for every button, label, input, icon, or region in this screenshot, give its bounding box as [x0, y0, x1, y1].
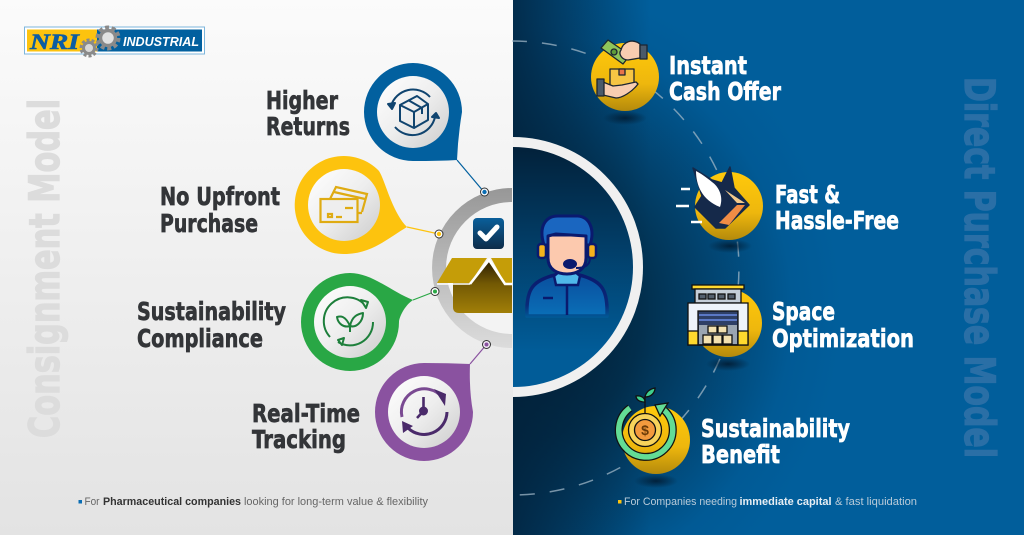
footnote: direct purchase audience: & fast liquidation: [835, 496, 917, 508]
pin: real-time tracking: [375, 340, 490, 461]
text: [772, 297, 914, 353]
dashed orbit: [512, 41, 739, 495]
tail node: [435, 230, 443, 238]
icon: credit cards: [320, 187, 367, 222]
icon: box with circular arrows: [388, 90, 439, 135]
pin: no upfront purchase: [295, 156, 443, 254]
item: Sustainability Benefit: [619, 388, 850, 488]
footnote: consignment audience: For: [84, 496, 100, 508]
icon: cash and box in hands: [597, 40, 647, 98]
text: [775, 180, 899, 235]
footnote: direct purchase audience: immediate capital: [740, 496, 832, 508]
text: Benefit: [701, 440, 780, 469]
logo: NRI Industrial: NRI: [29, 29, 81, 54]
central circle: box side: [432, 188, 512, 348]
label: Real-Time Tracking: [252, 399, 360, 454]
footnote: consignment audience: [78, 496, 428, 508]
text: [669, 51, 782, 106]
panel: consignment model background: [0, 0, 513, 535]
icon: coin with green cycle and sprout: [619, 388, 673, 457]
text: [701, 414, 850, 469]
icon: clock with arrows: [401, 389, 447, 434]
text: Hassle-Free: [775, 206, 899, 235]
central circle: agent side: [513, 137, 643, 397]
item: Space Optimization: [688, 285, 914, 371]
icon: checkbox: [473, 218, 504, 249]
label: Real-Time Tracking: Real-Time: [252, 399, 360, 428]
panel: direct purchase model background: [513, 0, 1024, 535]
label: Sustainability Compliance: Compliance: [137, 324, 263, 353]
icon: open box: [437, 258, 512, 313]
label: Sustainability Compliance: Sustainability: [137, 297, 286, 326]
logo: NRI Industrial: INDUSTRIAL: [123, 35, 199, 49]
icon: coin with green cycle and sprout: $: [641, 422, 649, 438]
text: Cash Offer: [669, 77, 782, 106]
item: Fast and Hassle-Free: [676, 167, 899, 253]
logo: NRI Industrial: [24, 27, 204, 56]
tail node: [482, 340, 490, 348]
label: Real-Time Tracking: Tracking: [252, 425, 346, 454]
pin: higher returns: [364, 63, 488, 196]
tail node: [431, 288, 439, 296]
label: Higher Returns: Higher: [266, 86, 339, 115]
text: Fast &: [775, 180, 840, 209]
label: Higher Returns: Returns: [266, 112, 350, 141]
label: No Upfront Purchase: No Upfront: [160, 182, 280, 211]
icon: customer support agent: [527, 216, 607, 316]
label: Higher Returns: [266, 86, 350, 141]
item: Instant Cash Offer: [591, 40, 782, 125]
footnote: consignment audience: Pharmaceutical companies: [103, 496, 241, 508]
footnote: direct purchase audience: For Companies needing: [624, 496, 737, 508]
icon: warehouse: [688, 285, 748, 345]
icon: winged box: [676, 167, 749, 228]
label: No Upfront Purchase: [160, 182, 280, 238]
label: Sustainability Compliance: [137, 297, 286, 353]
tail node: [480, 188, 488, 196]
footnote: consignment audience: looking for long-term value & flexibility: [244, 496, 428, 508]
icon: sprout in arrows: [324, 297, 373, 345]
text: Optimization: [772, 324, 914, 353]
text: Space: [772, 297, 835, 326]
pin: sustainability compliance: [301, 273, 439, 371]
footnote: direct purchase audience: [618, 496, 917, 508]
text: Sustainability: [701, 414, 850, 443]
text: Instant: [669, 51, 747, 80]
label: No Upfront Purchase: Purchase: [160, 209, 258, 238]
